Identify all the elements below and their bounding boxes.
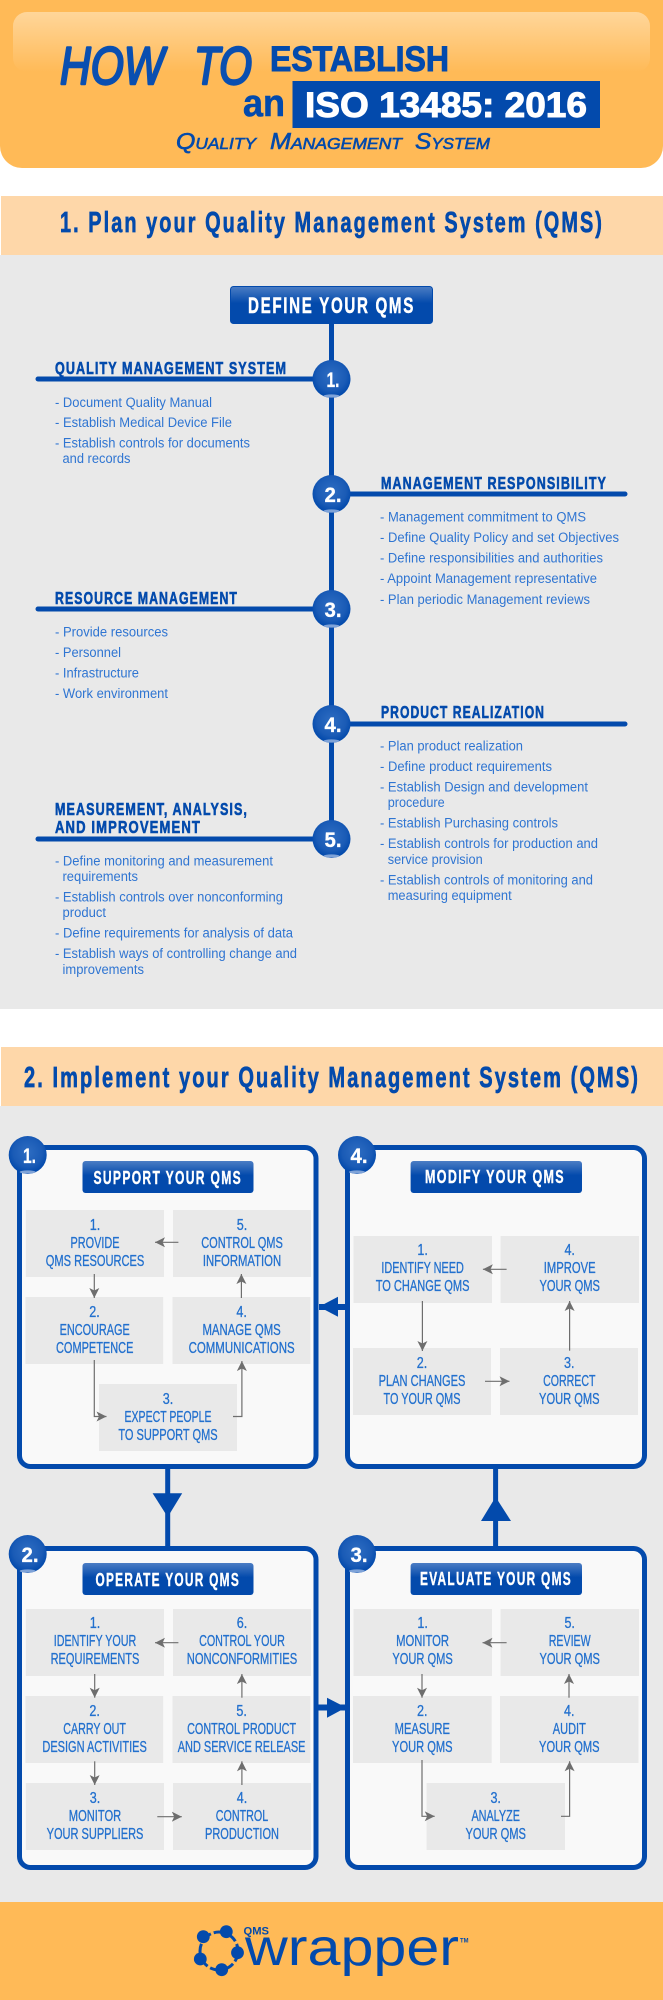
step: plan changes to your qms <box>353 1348 491 1415</box>
step: identify your requirements: IDENTIFY YOUR <box>54 1633 136 1650</box>
step: improve your qms: YOUR QMS <box>539 1278 600 1295</box>
list: step 2: - Define Quality Policy and set Objectives <box>380 530 619 545</box>
list: step 5 <box>55 853 297 977</box>
icon: ring of dots <box>194 1925 244 1976</box>
number badge 3: 3. <box>350 1544 368 1567</box>
button: modify your qms <box>411 1161 582 1193</box>
list: step 3: - Personnel <box>55 645 121 660</box>
step 1: quality management system <box>38 358 350 466</box>
button: define your qms <box>230 286 432 324</box>
title: an: an <box>243 83 285 125</box>
list: step 5: improvements <box>62 962 144 977</box>
step: monitor your qms <box>354 1609 492 1676</box>
step 1: quality management system: 1. <box>326 369 340 392</box>
step: monitor your qms: YOUR QMS <box>392 1651 453 1668</box>
step: analyze your qms: YOUR QMS <box>465 1826 526 1843</box>
logo: qms wrapper: QMS <box>244 1926 269 1938</box>
step: control product and service release <box>172 1696 310 1763</box>
step: improve your qms: 4. <box>564 1242 575 1259</box>
step: carry out design activities: DESIGN ACTIVITIES <box>42 1739 147 1756</box>
step: manage qms communications: MANAGE QMS <box>202 1322 281 1339</box>
step 5: measurement, analysis, improvement: AND IMPROVEMENT <box>55 817 201 837</box>
step: carry out design activities <box>25 1696 163 1763</box>
panel 3: evaluate your qms <box>338 1535 644 1868</box>
list: step 4: - Establish Design and development <box>380 780 588 795</box>
step: correct your qms: CORRECT <box>543 1373 596 1390</box>
step 3: resource management: RESOURCE MANAGEMENT <box>55 588 238 608</box>
step: improve your qms <box>501 1236 639 1303</box>
button: modify your qms: MODIFY YOUR QMS <box>425 1166 565 1187</box>
button: evaluate your qms: EVALUATE YOUR QMS <box>420 1568 572 1589</box>
panel 4: modify your qms <box>338 1136 644 1466</box>
list: step 2: - Plan periodic Management reviews <box>380 592 590 607</box>
step: encourage competence: ENCOURAGE <box>60 1322 130 1339</box>
step: carry out design activities: 2. <box>89 1703 100 1720</box>
list: step 1: and records <box>62 451 131 466</box>
button: evaluate your qms <box>411 1563 582 1595</box>
step: monitor your suppliers: 3. <box>90 1790 100 1807</box>
subtitle: quality management system <box>176 128 491 154</box>
list: step 4: - Define product requirements <box>380 759 552 774</box>
list: step 2: - Define responsibilities and authorities <box>380 551 603 566</box>
list: step 4: - Establish controls of monitoring and <box>380 873 593 888</box>
step: plan changes to your qms: 2. <box>417 1355 427 1372</box>
step: identify your requirements: 1. <box>90 1615 100 1632</box>
step: plan changes to your qms: PLAN CHANGES <box>379 1373 465 1390</box>
list: step 5: product <box>62 905 106 920</box>
button: operate your qms: OPERATE YOUR QMS <box>96 1569 240 1590</box>
panel 2: operate your qms <box>9 1535 316 1868</box>
step: monitor your suppliers <box>26 1783 164 1850</box>
step: identify need to change qms <box>354 1236 492 1303</box>
step: audit your qms: 4. <box>564 1703 575 1720</box>
number badge 3 <box>338 1535 376 1573</box>
step: expect people to support qms: EXPECT PEOPLE <box>124 1409 212 1426</box>
step: monitor your qms: MONITOR <box>396 1633 449 1650</box>
list: step 3: - Infrastructure <box>55 666 139 681</box>
connector arrow: modify to support <box>319 1297 346 1317</box>
step: expect people to support qms: 3. <box>163 1391 173 1408</box>
button: support your qms <box>82 1161 254 1193</box>
list: step 3: - Work environment <box>55 686 168 701</box>
connector arrow: support to operate <box>153 1468 182 1547</box>
number badge 2: 2. <box>22 1544 38 1567</box>
step: provide qms resources <box>26 1210 164 1277</box>
step: carry out design activities: CARRY OUT <box>63 1721 126 1738</box>
step: correct your qms: YOUR QMS <box>539 1391 600 1408</box>
list: step 4: procedure <box>388 795 445 810</box>
step: audit your qms: YOUR QMS <box>539 1739 600 1756</box>
step: control production <box>173 1783 311 1850</box>
logo: qms wrapper <box>194 1919 468 1977</box>
logo: qms wrapper: wrapper <box>244 1919 459 1977</box>
step: review your qms <box>501 1609 639 1676</box>
list: step 1 <box>55 395 250 466</box>
step: plan changes to your qms: TO YOUR QMS <box>384 1391 460 1408</box>
step: control your nonconformities <box>173 1609 311 1676</box>
list: step 3 <box>55 625 168 701</box>
step 4: product realization <box>312 702 625 903</box>
step: provide qms resources: PROVIDE <box>70 1235 120 1252</box>
step: control product and service release: 5. <box>236 1703 247 1720</box>
step: analyze your qms <box>427 1783 565 1850</box>
arrows: panel 2 <box>95 1643 242 1817</box>
step: review your qms: YOUR QMS <box>539 1651 600 1668</box>
step: correct your qms <box>500 1348 638 1415</box>
step 2: management responsibility <box>312 473 625 607</box>
step: control your nonconformities: NONCONFORMITIES <box>187 1651 297 1668</box>
list: step 2: - Appoint Management representative <box>380 571 597 586</box>
subtitle: quality management system: Quality <box>176 128 257 154</box>
title: ISO badge: ISO 13485: 2016 <box>305 86 587 125</box>
step: monitor your suppliers: MONITOR <box>69 1808 121 1825</box>
step: control qms information: INFORMATION <box>203 1253 281 1270</box>
step: control your nonconformities: 6. <box>237 1615 247 1632</box>
step: monitor your suppliers: YOUR SUPPLIERS <box>47 1826 143 1843</box>
step: control your nonconformities: CONTROL YOUR <box>199 1633 285 1650</box>
number badge 1 <box>9 1136 47 1174</box>
step: review your qms: 5. <box>564 1615 575 1632</box>
timeline spine <box>329 320 334 840</box>
step: control qms information <box>173 1210 311 1277</box>
list: step 1: - Document Quality Manual <box>55 395 212 410</box>
step: control production: CONTROL <box>216 1808 269 1825</box>
step: audit your qms: AUDIT <box>553 1721 586 1738</box>
step: analyze your qms: 3. <box>490 1790 501 1807</box>
title: how to: HOW <box>60 37 168 96</box>
step: encourage competence <box>25 1297 163 1364</box>
step: measure your qms <box>353 1696 492 1763</box>
step: control production: 4. <box>237 1790 247 1807</box>
logo: qms wrapper: TM <box>460 1939 468 1945</box>
step: encourage competence: COMPETENCE <box>56 1340 133 1357</box>
step 5: measurement, analysis, improvement: 5. <box>324 829 342 852</box>
list: step 1: - Establish controls for documents <box>55 436 250 451</box>
step: audit your qms <box>500 1696 638 1763</box>
footer band <box>0 1902 663 2000</box>
number badge 1: 1. <box>23 1145 36 1168</box>
step: expect people to support qms <box>99 1384 237 1451</box>
arrows: panel 1 <box>94 1242 242 1416</box>
step 2: management responsibility: 2. <box>324 484 342 507</box>
list: step 4: measuring equipment <box>388 888 512 903</box>
list: step 2 <box>380 510 619 607</box>
step: identify need to change qms: TO CHANGE QMS <box>376 1278 470 1295</box>
button: operate your qms <box>82 1563 254 1595</box>
step: identify your requirements <box>26 1609 164 1676</box>
list: step 5: - Define monitoring and measurement <box>55 853 273 868</box>
list: step 1: - Establish Medical Device File <box>55 415 232 430</box>
step: manage qms communications: 4. <box>236 1304 247 1321</box>
step 3: resource management: 3. <box>324 599 342 622</box>
step: measure your qms: YOUR QMS <box>392 1739 453 1756</box>
step: control production: PRODUCTION <box>205 1826 279 1843</box>
arrows: panel 4 <box>422 1269 570 1381</box>
panel 1: support your qms <box>9 1136 316 1466</box>
subtitle: quality management system: System <box>415 128 491 154</box>
header banner <box>0 0 663 168</box>
step: identify need to change qms: IDENTIFY NEED <box>381 1260 464 1277</box>
connector arrow: evaluate to modify <box>481 1468 511 1547</box>
step: provide qms resources: 1. <box>90 1217 100 1234</box>
step 1: quality management system: QUALITY MANAGEMENT SYSTEM <box>55 358 287 378</box>
step: manage qms communications <box>172 1297 310 1364</box>
button: define your qms: DEFINE YOUR QMS <box>248 293 415 318</box>
step 4: product realization: 4. <box>324 714 342 737</box>
connector arrow: operate to evaluate <box>318 1698 346 1718</box>
step: control qms information: CONTROL QMS <box>201 1235 283 1252</box>
arrows: panel 3 <box>422 1643 570 1816</box>
step: encourage competence: 2. <box>89 1304 100 1321</box>
step 5: measurement, analysis, improvement <box>38 799 350 977</box>
list: step 4: - Establish controls for production and <box>380 836 598 851</box>
step 4: product realization: PRODUCT REALIZATION <box>381 702 545 722</box>
subtitle: quality management system: Management <box>270 128 403 154</box>
step: control product and service release: CONTROL PRODUCT <box>187 1721 296 1738</box>
step: provide qms resources: QMS RESOURCES <box>46 1253 144 1270</box>
section 1 background <box>0 255 663 1009</box>
step: review your qms: REVIEW <box>549 1633 591 1650</box>
button: support your qms: SUPPORT YOUR QMS <box>94 1167 242 1188</box>
step: analyze your qms: ANALYZE <box>471 1808 520 1825</box>
step: expect people to support qms: TO SUPPORT QMS <box>118 1427 218 1444</box>
section band 1 <box>1 196 663 255</box>
list: step 3: - Provide resources <box>55 625 168 640</box>
step: identify need to change qms: 1. <box>417 1242 428 1259</box>
list: step 4 <box>380 739 598 903</box>
list: step 5: - Define requirements for analysis of data <box>55 926 293 941</box>
step: measure your qms: 2. <box>417 1703 428 1720</box>
list: step 5: requirements <box>62 869 138 884</box>
title: how to: TO <box>194 37 252 96</box>
step 5: measurement, analysis, improvement: MEASUREMENT, ANALYSIS, <box>55 799 248 819</box>
title: establish: ESTABLISH <box>270 40 449 79</box>
step: correct your qms: 3. <box>564 1355 575 1372</box>
step: manage qms communications: COMMUNICATIONS <box>189 1340 295 1357</box>
step 3: resource management <box>38 588 350 701</box>
list: step 4: service provision <box>388 852 483 867</box>
step: improve your qms: IMPROVE <box>544 1260 596 1277</box>
step: identify your requirements: REQUIREMENTS <box>51 1651 139 1668</box>
list: step 2: - Management commitment to QMS <box>380 510 586 525</box>
step: monitor your qms: 1. <box>417 1615 428 1632</box>
list: step 5: - Establish ways of controlling change and <box>55 946 297 961</box>
list: step 5: - Establish controls over nonconforming <box>55 890 283 905</box>
title: how to <box>60 37 252 96</box>
number badge 4 <box>338 1136 376 1174</box>
number badge 2 <box>9 1535 47 1573</box>
number badge 4: 4. <box>350 1145 368 1168</box>
section 2 background <box>0 1106 663 1902</box>
section band 2 <box>1 1047 663 1106</box>
step: control qms information: 5. <box>237 1217 247 1234</box>
step: measure your qms: MEASURE <box>395 1721 450 1738</box>
step: control product and service release: AND SERVICE RELEASE <box>178 1739 305 1756</box>
list: step 4: - Plan product realization <box>380 739 523 754</box>
list: step 4: - Establish Purchasing controls <box>380 816 558 831</box>
